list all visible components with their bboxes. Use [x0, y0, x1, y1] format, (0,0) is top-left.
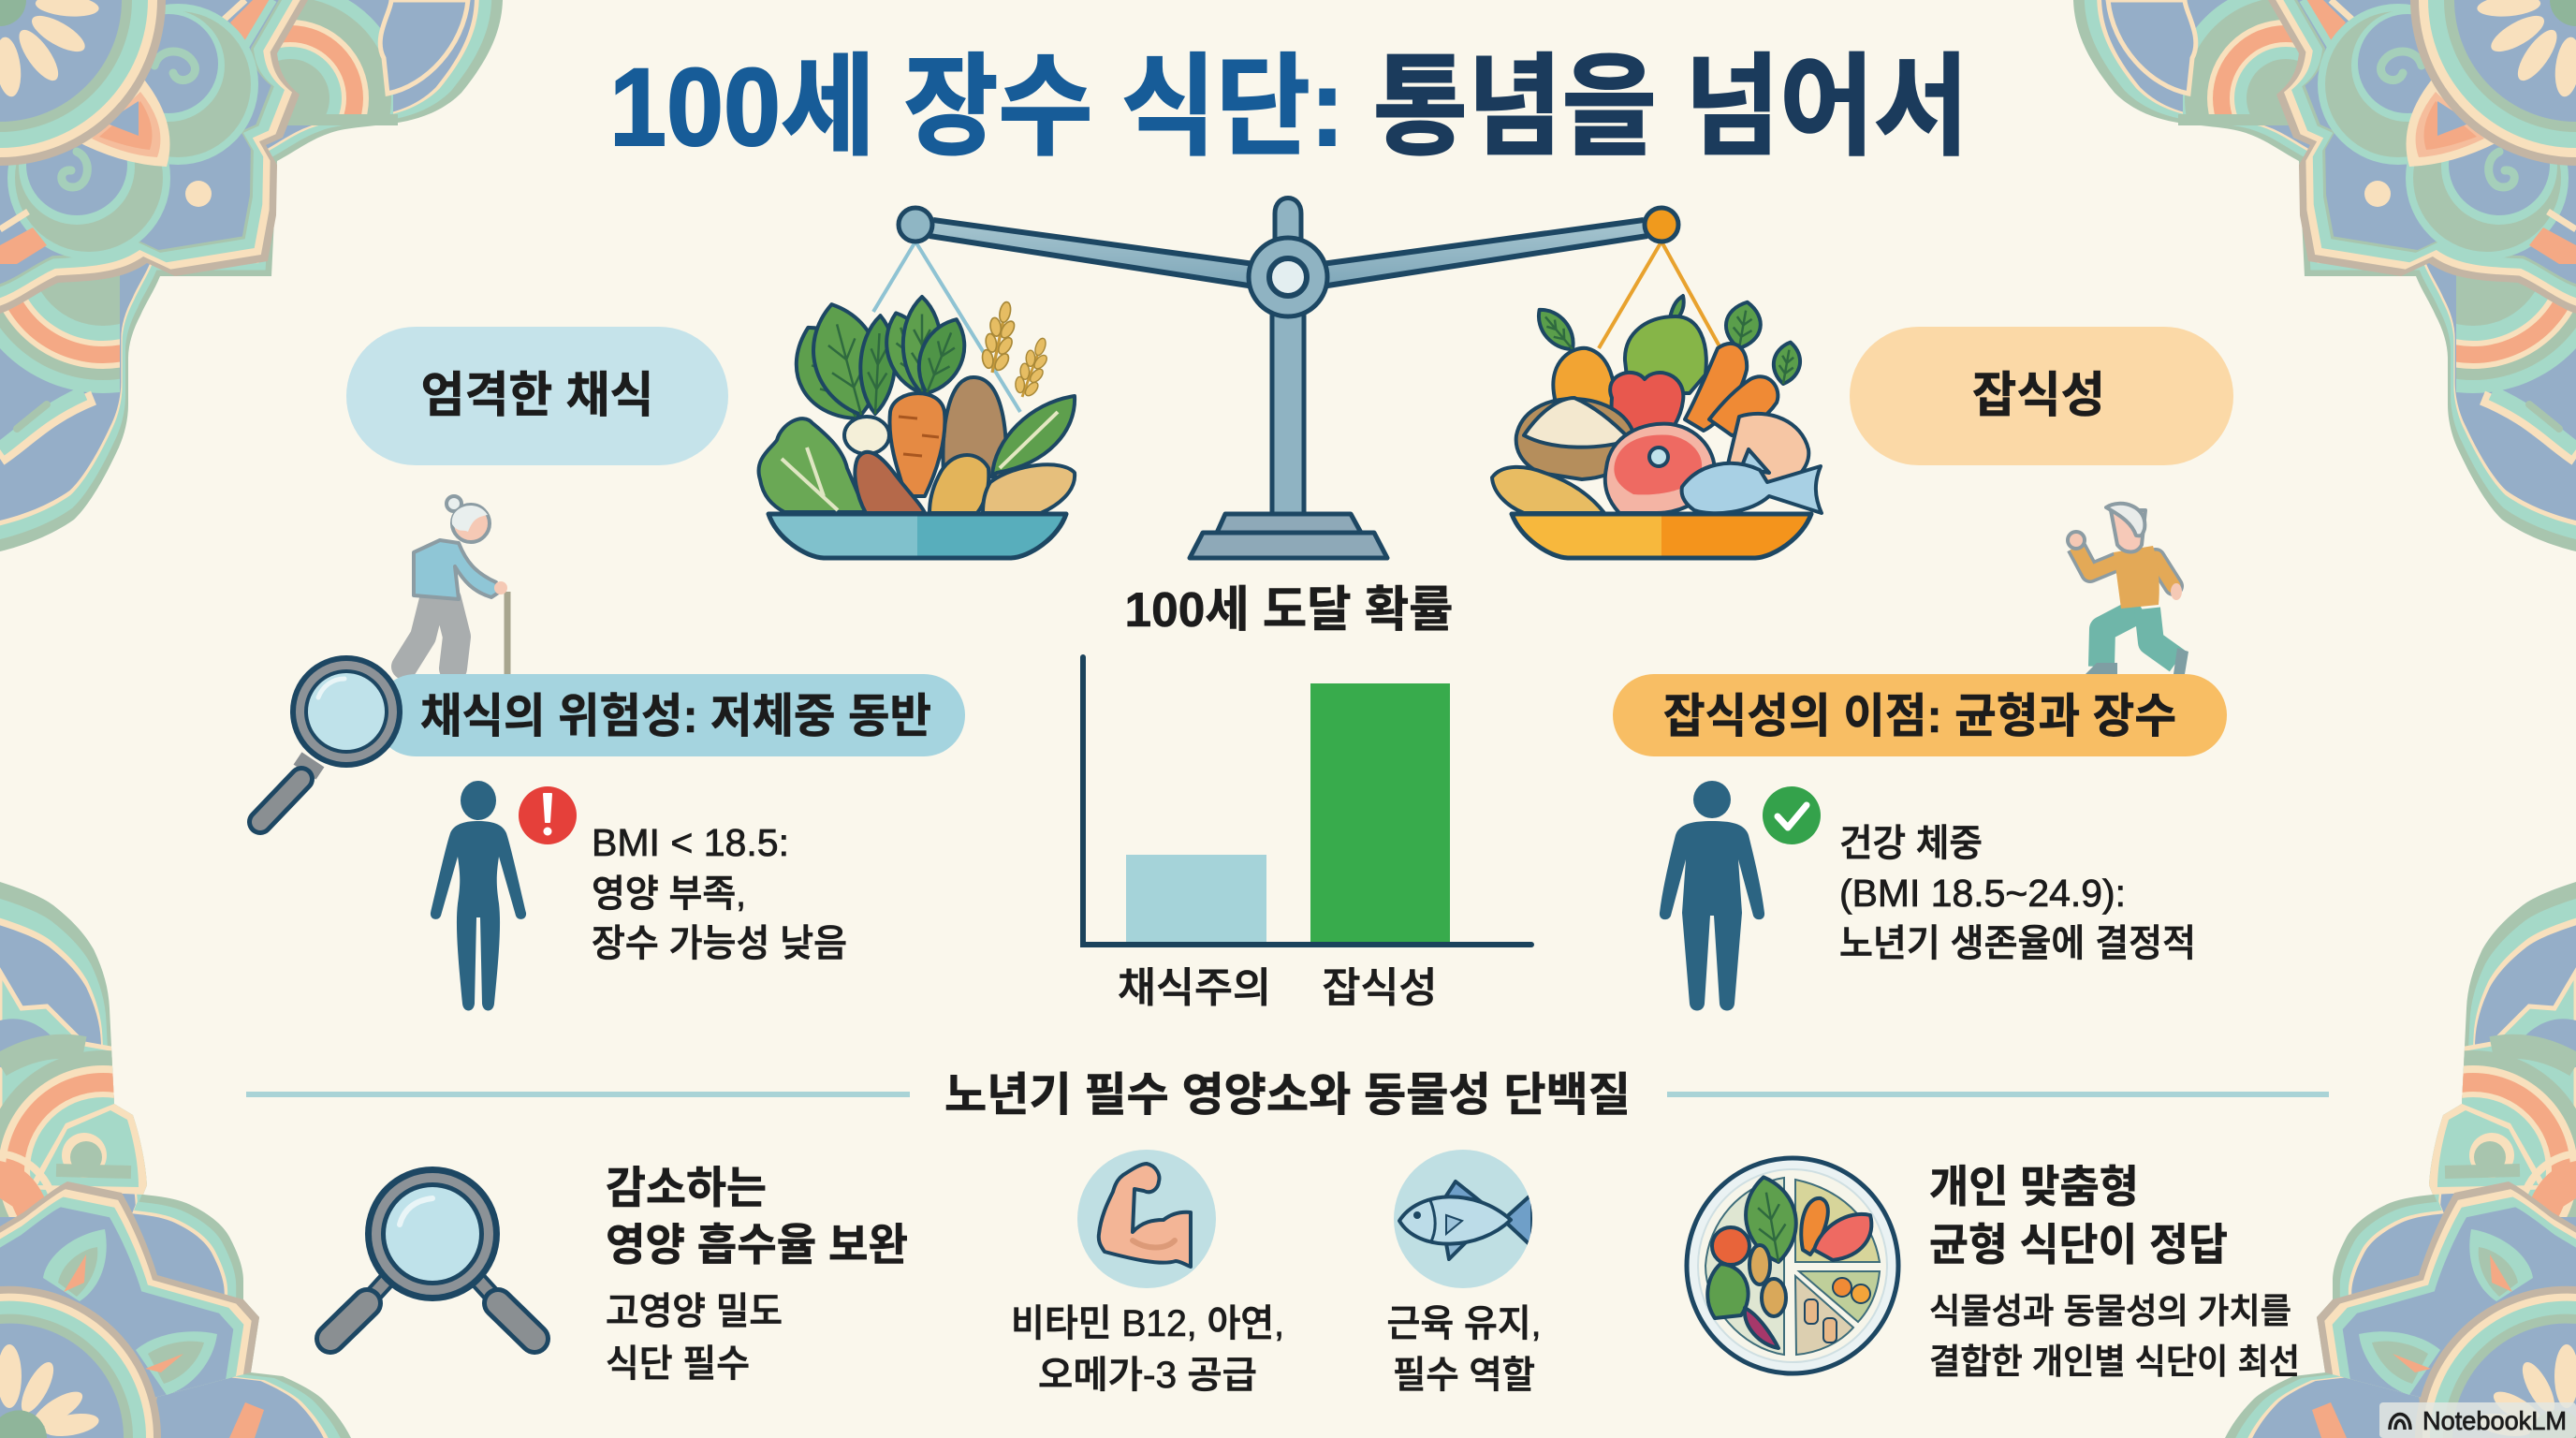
bar label: vegetarian: 채식주의 [1118, 965, 1271, 1011]
text: nutrients: 비타민 B12, 아연, [1011, 1303, 1284, 1344]
icon: green check [1763, 786, 1821, 844]
scale beam [899, 208, 1678, 286]
text: personalized diet: 균형 식단이 정답 [1929, 1220, 2228, 1269]
text: absorption [606, 1163, 908, 1385]
icon: healthy body figure [1660, 781, 1764, 1011]
plate wedge: vegetables [1705, 1178, 1784, 1355]
icon: double-handled magnifier [330, 1167, 534, 1339]
corner ornament: top left [0, 0, 503, 551]
text: personalized diet: 식물성과 동물성의 가치를 [1929, 1292, 2291, 1330]
label pill: omnivore: 잡식성 [1972, 369, 2105, 423]
icon: balanced plate [1687, 1158, 1898, 1373]
text: personalized diet: 개인 맞춤형 [1929, 1162, 2139, 1211]
text: healthy weight: 건강 체중 [1839, 823, 1983, 864]
text: BMI underweight: 장수 가능성 낮음 [592, 923, 847, 964]
icon: elderly person with cane [404, 496, 507, 674]
chart title: 100세 도달 확률 [1125, 583, 1453, 638]
plate wedge: fruit [1799, 1271, 1880, 1322]
chart axes [1083, 657, 1531, 945]
text: nutrients: 오메가-3 공급 [1038, 1355, 1257, 1396]
text: absorption: 식단 필수 [606, 1343, 750, 1385]
text: BMI underweight: BMI < 18.5: [592, 821, 789, 864]
plate wedge: carrot and meat [1795, 1180, 1880, 1262]
icon: running elderly man [2068, 504, 2188, 674]
label pill: omnivore [1850, 327, 2233, 465]
scale ropes right [1599, 242, 1720, 348]
pill [374, 674, 965, 756]
text: muscle: 필수 역할 [1393, 1355, 1535, 1396]
text: healthy weight: (BMI 18.5~24.9): [1839, 872, 2126, 915]
text: absorption: 감소하는 [606, 1163, 767, 1212]
scale post and base [1190, 198, 1387, 558]
text: personalized diet [1929, 1162, 2300, 1381]
callout: omnivore benefits: 잡식성의 이점: 균형과 장수 [1663, 690, 2176, 742]
bar: vegetarian [1126, 855, 1266, 943]
bowl right [1512, 514, 1811, 558]
text: muscle: 근육 유지, [1387, 1303, 1541, 1344]
section heading: 노년기 필수 영양소와 동물성 단백질 [944, 1070, 1631, 1121]
label pill: strict vegetarian: 엄격한 채식 [421, 369, 653, 423]
watermark: NotebookLM: NotebookLM [2422, 1406, 2567, 1435]
icon: flexed arm [1077, 1150, 1216, 1288]
icon: balance scale with food [759, 198, 1822, 558]
text: muscle [1387, 1303, 1541, 1396]
plant foods [759, 296, 1075, 513]
callout: omnivore benefits [1613, 674, 2227, 756]
icon: fish [1394, 1150, 1532, 1288]
text: absorption: 영양 흡수율 보완 [606, 1220, 908, 1269]
text: nutrients [1011, 1303, 1284, 1396]
icon: red alert [519, 786, 577, 844]
bar chart: probability of reaching 100 [1083, 583, 1531, 1011]
callout: vegetarian risk [260, 655, 965, 822]
bar: omnivore [1310, 683, 1450, 943]
title: 100세 장수 식단: 통념을 넘어서 [609, 46, 1969, 169]
text: BMI underweight [592, 821, 847, 964]
icon: magnifying glass [260, 655, 402, 822]
text: BMI underweight: 영양 부족, [592, 873, 746, 915]
mixed foods [1492, 296, 1822, 513]
text: absorption: 고영양 밀도 [606, 1291, 783, 1332]
watermark: NotebookLM [2379, 1402, 2576, 1438]
label pill: strict vegetarian [346, 327, 728, 465]
corner ornament: bottom right [2225, 882, 2576, 1438]
bar label: omnivore: 잡식성 [1322, 965, 1438, 1011]
text: healthy weight [1839, 823, 2196, 964]
scale ropes left [873, 242, 1020, 412]
section heading [246, 1070, 2329, 1121]
callout: vegetarian risk: 채식의 위험성: 저체중 동반 [420, 690, 931, 742]
bowl left [768, 514, 1066, 558]
text: personalized diet: 결합한 개인별 식단이 최선 [1929, 1343, 2300, 1381]
text: healthy weight: 노년기 생존율에 결정적 [1839, 923, 2196, 964]
corner ornament: top right [2073, 0, 2576, 551]
plate wedge: grains [1795, 1276, 1853, 1355]
icon: thin body figure [431, 781, 526, 1011]
corner ornament: bottom left [0, 882, 351, 1438]
